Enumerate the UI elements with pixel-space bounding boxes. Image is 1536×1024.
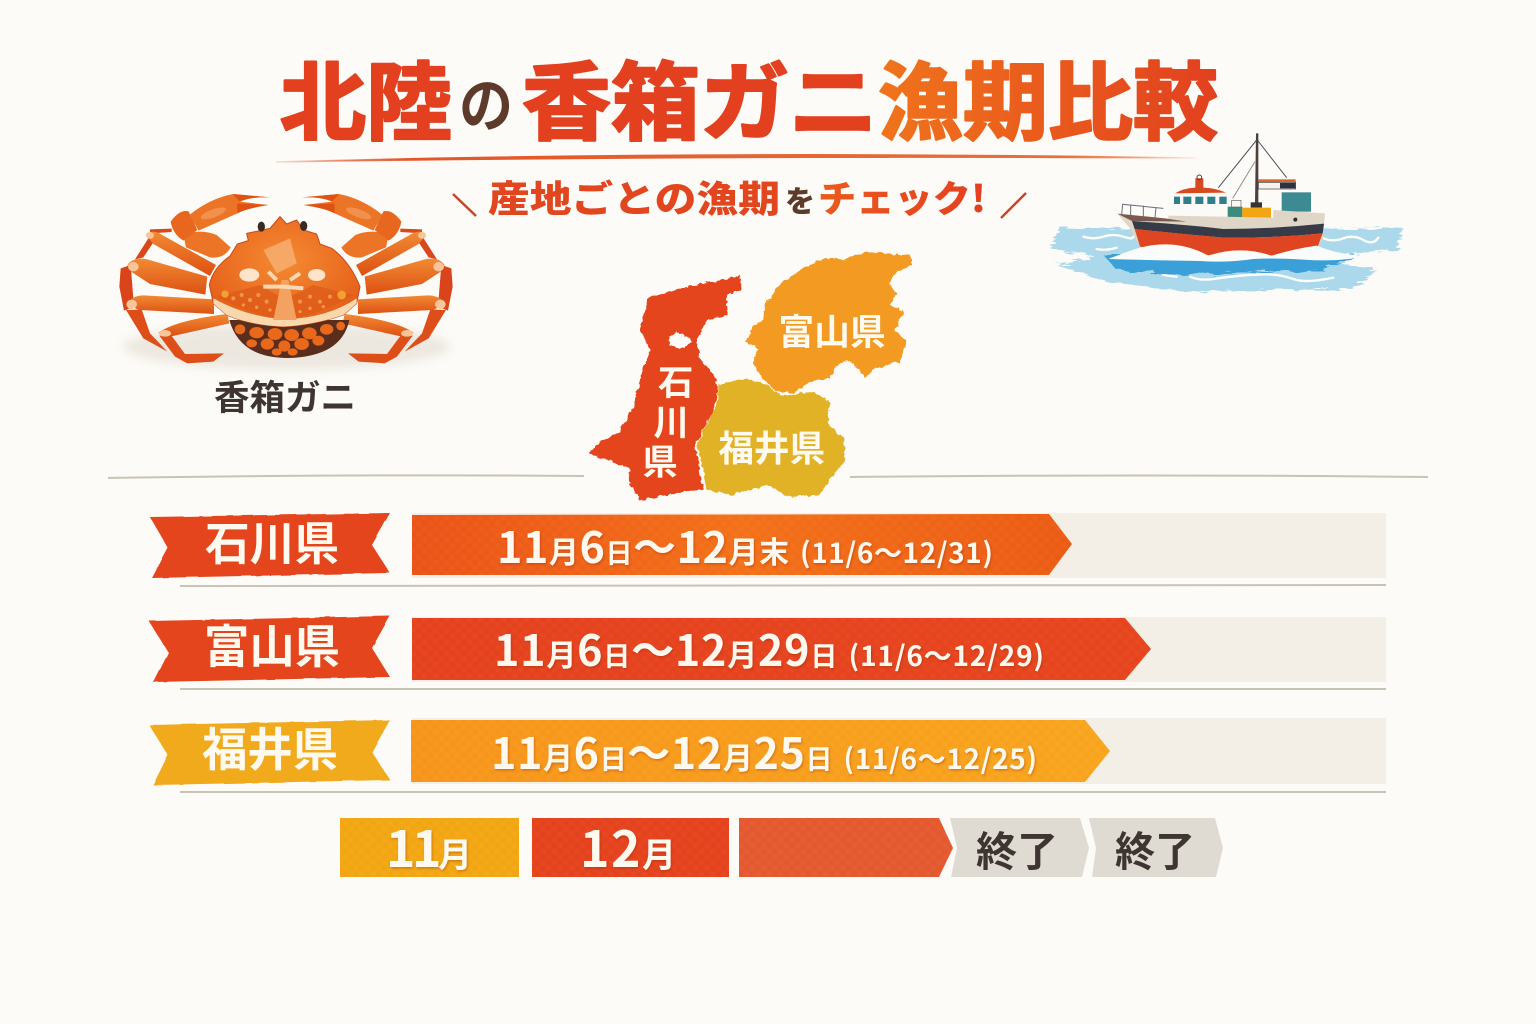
sea — [1050, 228, 1403, 292]
legend: month timeline — [340, 810, 1223, 882]
title: 香箱ガニ — [522, 35, 878, 158]
ribbon label: 石川県 — [205, 508, 339, 574]
apron — [229, 320, 349, 358]
ended block 1: 終了 — [976, 818, 1058, 878]
subtitle: を — [785, 177, 815, 221]
arrow block — [739, 818, 953, 877]
title underline — [276, 155, 1196, 162]
ended block 1 — [950, 818, 1089, 878]
November block: 11月 — [386, 810, 472, 882]
December block: 12月 — [580, 810, 676, 882]
ribbon label — [149, 714, 390, 785]
prefecture: Ishikawa — [588, 275, 742, 500]
subtitle: 産地ごとの漁期 — [488, 169, 780, 223]
prefecture: Fukui: 福井県 — [718, 420, 825, 472]
prefecture: Toyama: 富山県 — [778, 303, 886, 355]
illustration: crab — [119, 194, 453, 370]
title: 北陸 — [280, 35, 452, 158]
eyes — [258, 222, 265, 232]
title — [280, 35, 1218, 158]
period bar: 11月6日〜12月29日 (11/6〜12/29) — [494, 617, 1044, 679]
lower leg segments — [135, 229, 172, 259]
ribbon label: 富山県 — [204, 611, 340, 677]
map of Hokuriku — [588, 252, 912, 500]
rigging — [1218, 140, 1287, 198]
upper leg segments — [146, 232, 216, 276]
subtitle: チェック! — [818, 169, 986, 223]
ended block 2: 終了 — [1115, 818, 1195, 878]
period bar: 11月6日〜12月25日 (11/6〜12/25) — [491, 720, 1037, 782]
prefecture: Ishikawa: 石 — [658, 355, 693, 406]
cargo — [1228, 207, 1242, 219]
period bar: 11月6日〜12月末 (11/6〜12/31) — [497, 514, 993, 576]
row: Toyama — [149, 611, 1386, 689]
track — [412, 718, 1386, 784]
mast — [1255, 133, 1258, 203]
row: Ishikawa — [150, 508, 1386, 586]
prefecture: Toyama — [746, 252, 912, 393]
joint highlights — [128, 262, 139, 271]
December block — [532, 810, 729, 882]
subtitle — [453, 169, 1026, 223]
illustration: fishing boat — [1050, 133, 1403, 292]
claw — [183, 232, 231, 258]
wheelhouse — [1170, 193, 1227, 218]
ended block 2 — [1089, 818, 1223, 878]
carapace — [209, 217, 360, 327]
prefecture: Ishikawa: 県 — [642, 434, 678, 485]
hull — [1117, 210, 1325, 256]
title: 漁期比較 — [878, 35, 1218, 158]
November block — [340, 810, 519, 882]
bow wave — [1108, 244, 1370, 262]
row: Fukui — [149, 714, 1386, 792]
aft structure — [1258, 179, 1296, 183]
ribbon label — [150, 508, 390, 578]
bow rail — [1122, 204, 1163, 218]
track — [412, 513, 1386, 578]
prefecture: Fukui — [697, 378, 845, 497]
ribbon label: 福井県 — [202, 714, 338, 780]
title: の — [459, 58, 513, 145]
horizontal divider right — [850, 476, 1428, 477]
horizontal divider left — [108, 475, 584, 478]
track — [412, 617, 1386, 682]
ribbon label — [149, 611, 390, 682]
crab label: 香箱ガニ — [214, 370, 356, 421]
prefecture: Ishikawa: 川 — [653, 395, 689, 446]
